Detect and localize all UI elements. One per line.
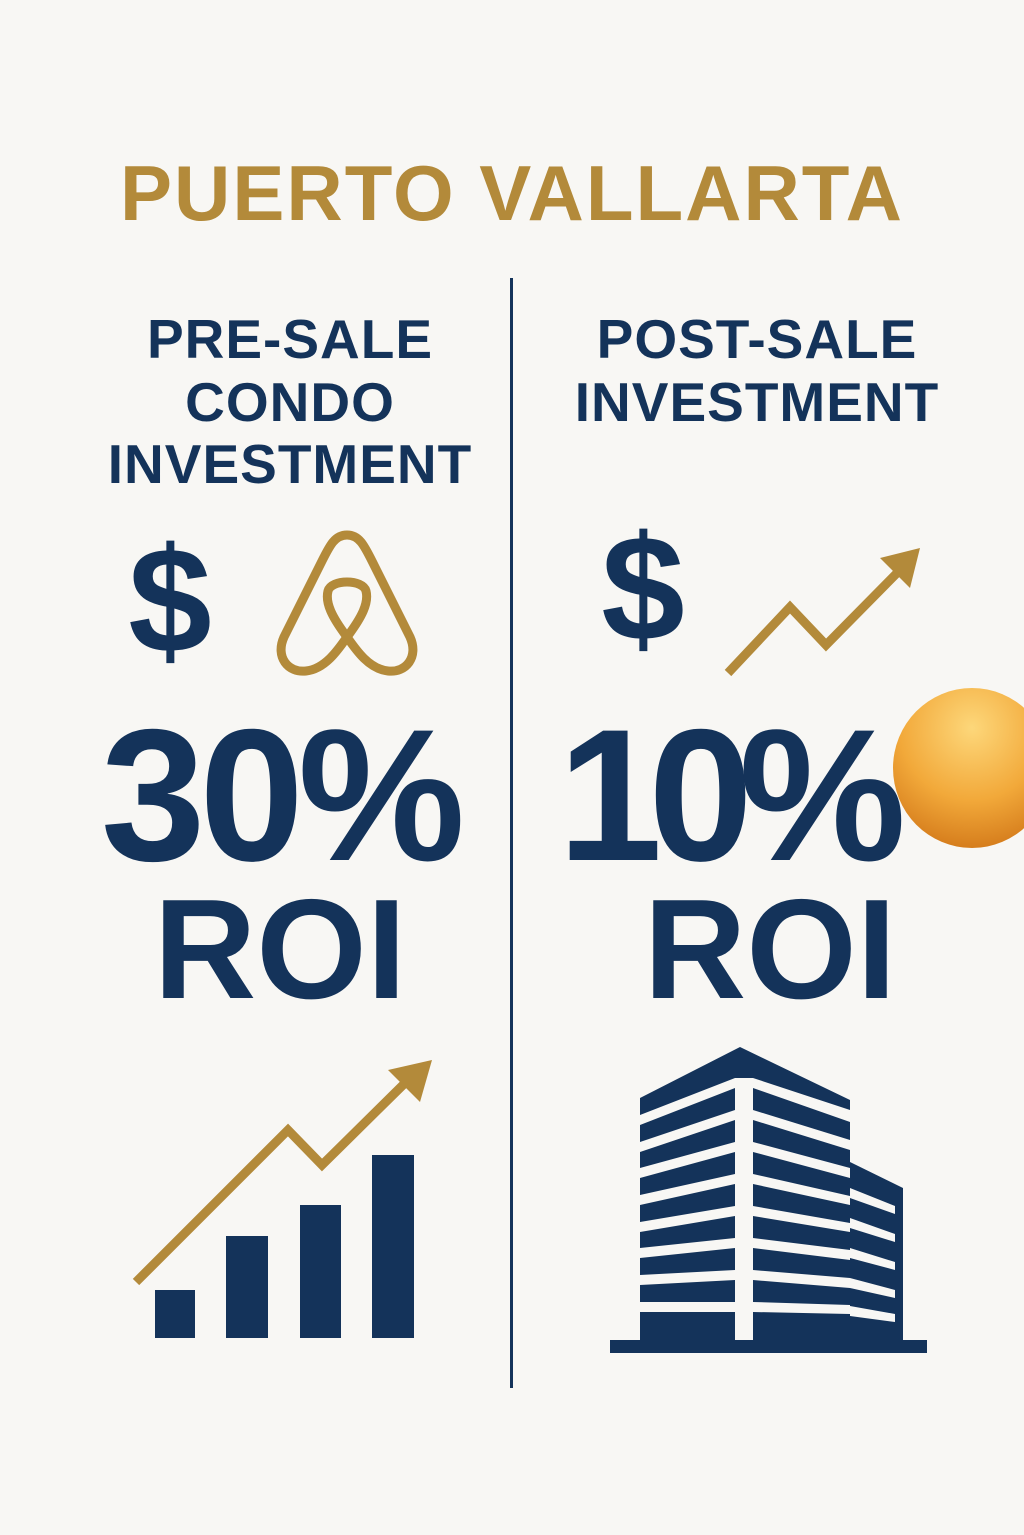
heading: pre-sale: CONDO xyxy=(185,370,395,432)
icon: airbnb xyxy=(276,530,418,676)
stat: 30%: 30% xyxy=(101,690,459,900)
heading: pre-sale xyxy=(108,308,472,495)
icon: building xyxy=(610,1047,927,1353)
icon: trend arrow right xyxy=(724,548,920,676)
divider xyxy=(510,278,513,1388)
stat: 10%: 10% xyxy=(558,690,892,900)
heading: post-sale: INVESTMENT xyxy=(575,370,939,432)
icon: dollar right: $ xyxy=(601,504,685,672)
icon: dollar left: $ xyxy=(128,516,212,684)
icon: orange ball xyxy=(893,688,1024,848)
heading: pre-sale: PRE-SALE xyxy=(147,308,433,370)
heading: pre-sale: INVESTMENT xyxy=(108,433,472,495)
heading: post-sale xyxy=(575,308,939,432)
title: PUERTO VALLARTA xyxy=(120,149,904,237)
stat: ROI left: ROI xyxy=(154,870,406,1029)
heading: post-sale: POST-SALE xyxy=(597,308,917,370)
stat: ROI right: ROI xyxy=(644,870,896,1029)
chart: bar chart with arrow xyxy=(132,1060,432,1338)
